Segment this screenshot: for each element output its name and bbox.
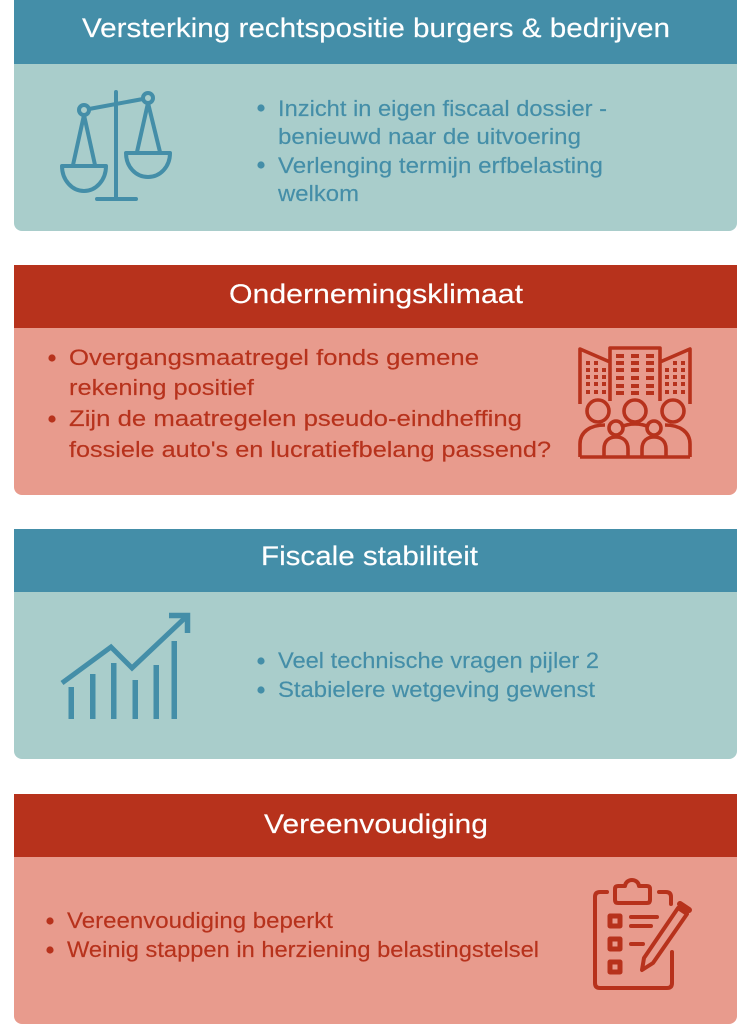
icon: scales <box>62 92 170 199</box>
bullet list: benieuwd naar de uitvoering <box>278 124 581 149</box>
panel: fiscale stabiliteit <box>14 529 737 759</box>
panel: vereenvoudiging <box>14 794 737 1024</box>
bullet list: Vereenvoudiging beperkt <box>67 908 333 933</box>
panel background <box>14 794 737 1024</box>
bullet list: Weinig stappen in herziening belastingstelsel <box>67 937 539 962</box>
bullet list: Stabielere wetgeving gewenst <box>278 677 595 702</box>
bullet list <box>257 96 607 206</box>
bullet list: rekening positief <box>69 375 255 400</box>
icon: checklist with pencil <box>595 880 689 988</box>
bullet list: fossiele auto's en lucratiefbelang passend? <box>69 437 551 462</box>
bullet list: Veel technische vragen pijler 2 <box>278 648 599 673</box>
panel background <box>14 529 737 759</box>
panel background <box>14 265 737 495</box>
bullet list: Inzicht in eigen fiscaal dossier - <box>278 96 607 121</box>
panel header <box>14 529 737 592</box>
panel header <box>14 794 737 857</box>
bullet list: Verlenging termijn erfbelasting <box>278 153 603 178</box>
bullet list: Zijn de maatregelen pseudo-eindheffing <box>69 406 522 431</box>
heading: Versterking rechtspositie burgers & bedrijven <box>82 13 670 43</box>
bullet list <box>257 648 599 702</box>
panel: ondernemingsklimaat <box>14 265 737 495</box>
heading: Vereenvoudiging <box>264 809 488 839</box>
bullet list: Overgangsmaatregel fonds gemene <box>69 345 479 370</box>
icon: city and people <box>580 348 690 457</box>
bullet list <box>48 345 551 462</box>
heading: Ondernemingsklimaat <box>229 279 524 309</box>
windows <box>586 354 685 395</box>
icon: growth chart <box>62 616 188 719</box>
panel background <box>14 0 737 231</box>
bullet list: welkom <box>277 181 359 206</box>
bullet list <box>46 908 539 962</box>
panel header <box>14 0 737 64</box>
panel header <box>14 265 737 328</box>
panel: rechtspositie <box>14 0 737 231</box>
heading: Fiscale stabiliteit <box>261 541 479 571</box>
